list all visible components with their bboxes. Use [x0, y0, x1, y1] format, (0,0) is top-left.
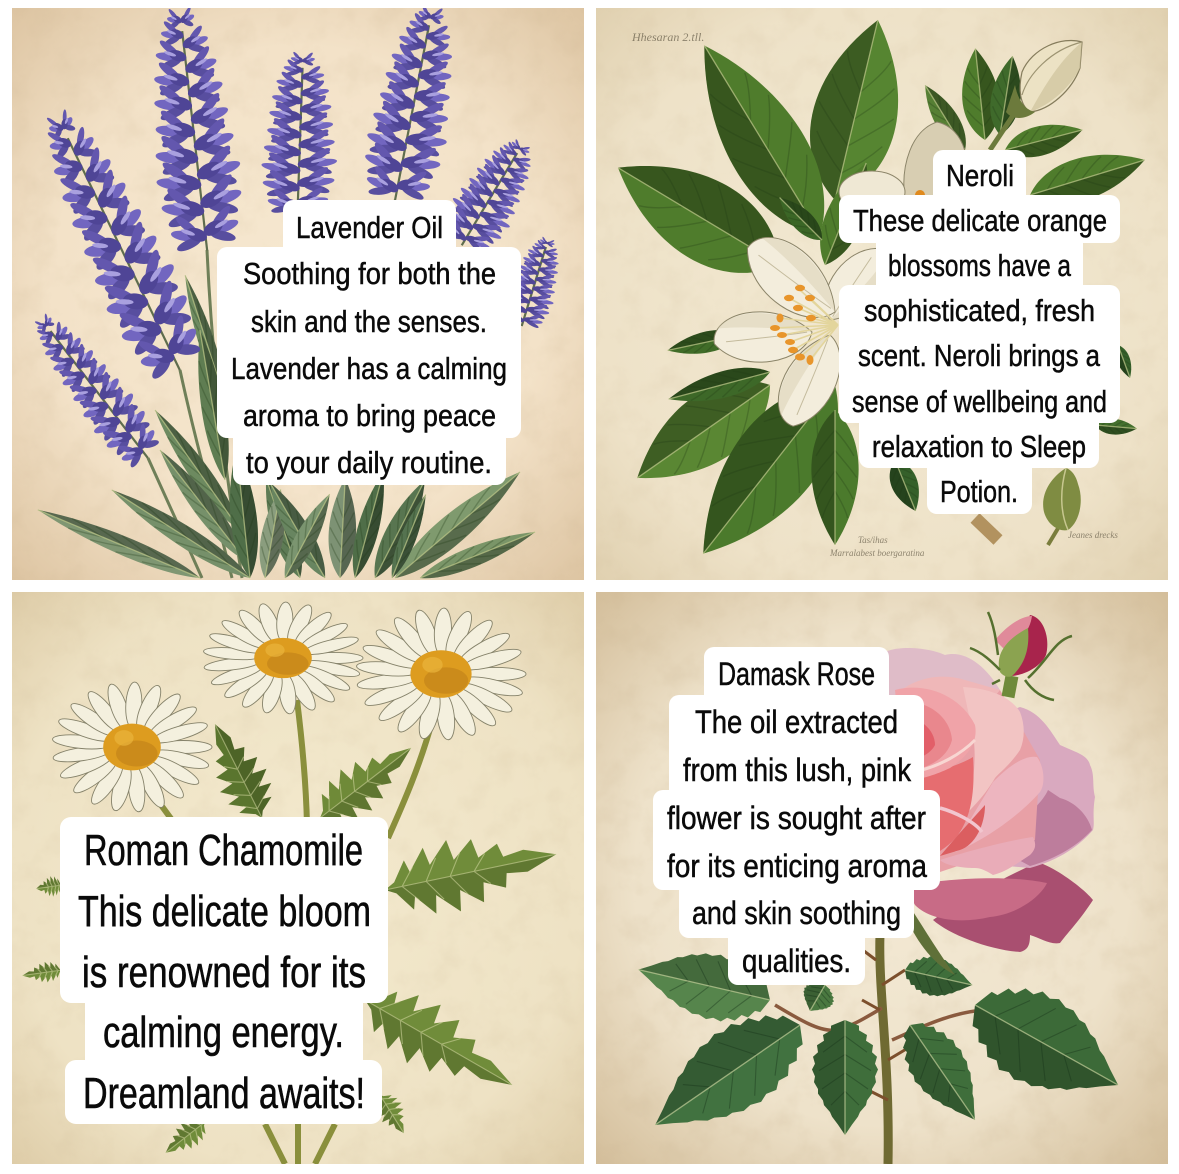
description: The oil extracted — [695, 704, 898, 740]
description: Dreamland awaits! — [83, 1069, 365, 1118]
botanical script note: Hhesaran 2.tll. — [631, 30, 704, 44]
text block: damask rose — [653, 647, 940, 985]
rose bloom — [885, 648, 1095, 952]
lavender leaves — [34, 273, 539, 589]
description: calming energy. — [103, 1008, 344, 1057]
description: to your daily routine. — [246, 445, 492, 480]
description: aroma to bring peace — [243, 398, 496, 433]
middle pale petal — [955, 757, 1043, 852]
text block: roman chamomile — [60, 817, 388, 1124]
daisy flowers — [52, 602, 526, 812]
panel: lavender oil — [12, 0, 584, 589]
heading: Lavender Oil — [296, 210, 443, 245]
bottom pale petal — [940, 837, 1035, 875]
text block: neroli — [839, 150, 1120, 514]
panel background — [12, 592, 584, 1164]
description: sense of wellbeing and — [852, 384, 1107, 419]
description: for its enticing aroma — [667, 848, 927, 884]
green bud — [1043, 468, 1081, 545]
description: Potion. — [940, 474, 1018, 509]
panel: neroli — [596, 8, 1168, 580]
top bud — [990, 40, 1082, 150]
description: qualities. — [742, 943, 851, 979]
description: is renowned for its — [82, 948, 366, 997]
botanical captions — [829, 530, 1118, 558]
lower right petal — [933, 862, 1093, 952]
description: This delicate bloom — [78, 887, 371, 936]
lower petal — [912, 878, 1047, 920]
heading: Neroli — [946, 158, 1014, 193]
neroli flower — [713, 122, 967, 435]
rose leaves — [638, 953, 1118, 1135]
description: from this lush, pink — [683, 752, 912, 788]
paper texture — [12, 592, 584, 1164]
rose base fill — [940, 690, 1040, 872]
rose stem and branches — [775, 935, 985, 1164]
large pink petal — [963, 687, 1024, 815]
description: and skin soothing — [692, 895, 901, 931]
description — [667, 704, 927, 979]
sepal under rose — [913, 913, 955, 975]
lavender flower spikes — [18, 0, 572, 475]
botanical captions: Tas/ihas — [858, 535, 888, 545]
botanical captions: Jeanes drecks — [1068, 530, 1118, 540]
description: skin and the senses. — [251, 304, 487, 339]
description: relaxation to Sleep — [872, 429, 1086, 464]
swirl — [895, 688, 976, 782]
description — [852, 203, 1107, 509]
panel background — [596, 592, 1168, 1164]
back petals — [838, 122, 965, 200]
label background — [839, 150, 1120, 514]
outer mauve petal — [1012, 707, 1095, 868]
label background — [60, 817, 388, 1124]
description — [231, 256, 507, 480]
chamomile stems — [150, 700, 432, 1164]
description: These delicate orange — [853, 203, 1107, 238]
centre cup — [924, 757, 974, 851]
chamomile leaves — [21, 712, 564, 1164]
description: blossoms have a — [888, 248, 1072, 283]
panel background — [12, 8, 584, 580]
heading: Damask Rose — [718, 656, 875, 692]
stamens — [770, 285, 838, 365]
top pale petals — [887, 648, 1000, 695]
heading: Roman Chamomile — [84, 826, 363, 875]
neroli stem stub — [975, 518, 998, 540]
description: Soothing for both the — [243, 256, 496, 291]
description: Lavender has a calming — [231, 351, 507, 386]
description: scent. Neroli brings a — [858, 338, 1101, 373]
panel: damask rose — [596, 592, 1168, 1164]
panel background — [596, 8, 1168, 580]
description — [78, 887, 371, 1118]
panel: roman chamomile — [12, 592, 584, 1164]
text block: lavender oil — [217, 200, 521, 485]
lavender stems — [148, 200, 395, 578]
rose bud — [970, 612, 1072, 700]
neroli leaves — [618, 20, 1145, 554]
description: flower is sought after — [667, 800, 926, 836]
paper texture — [154, 176, 472, 488]
description: sophisticated, fresh — [864, 293, 1095, 328]
paper texture — [596, 8, 1168, 580]
label background — [653, 647, 940, 985]
paper texture — [628, 628, 1153, 1147]
label background — [217, 200, 521, 485]
botanical captions: Marralabest boergaratina — [829, 548, 925, 558]
